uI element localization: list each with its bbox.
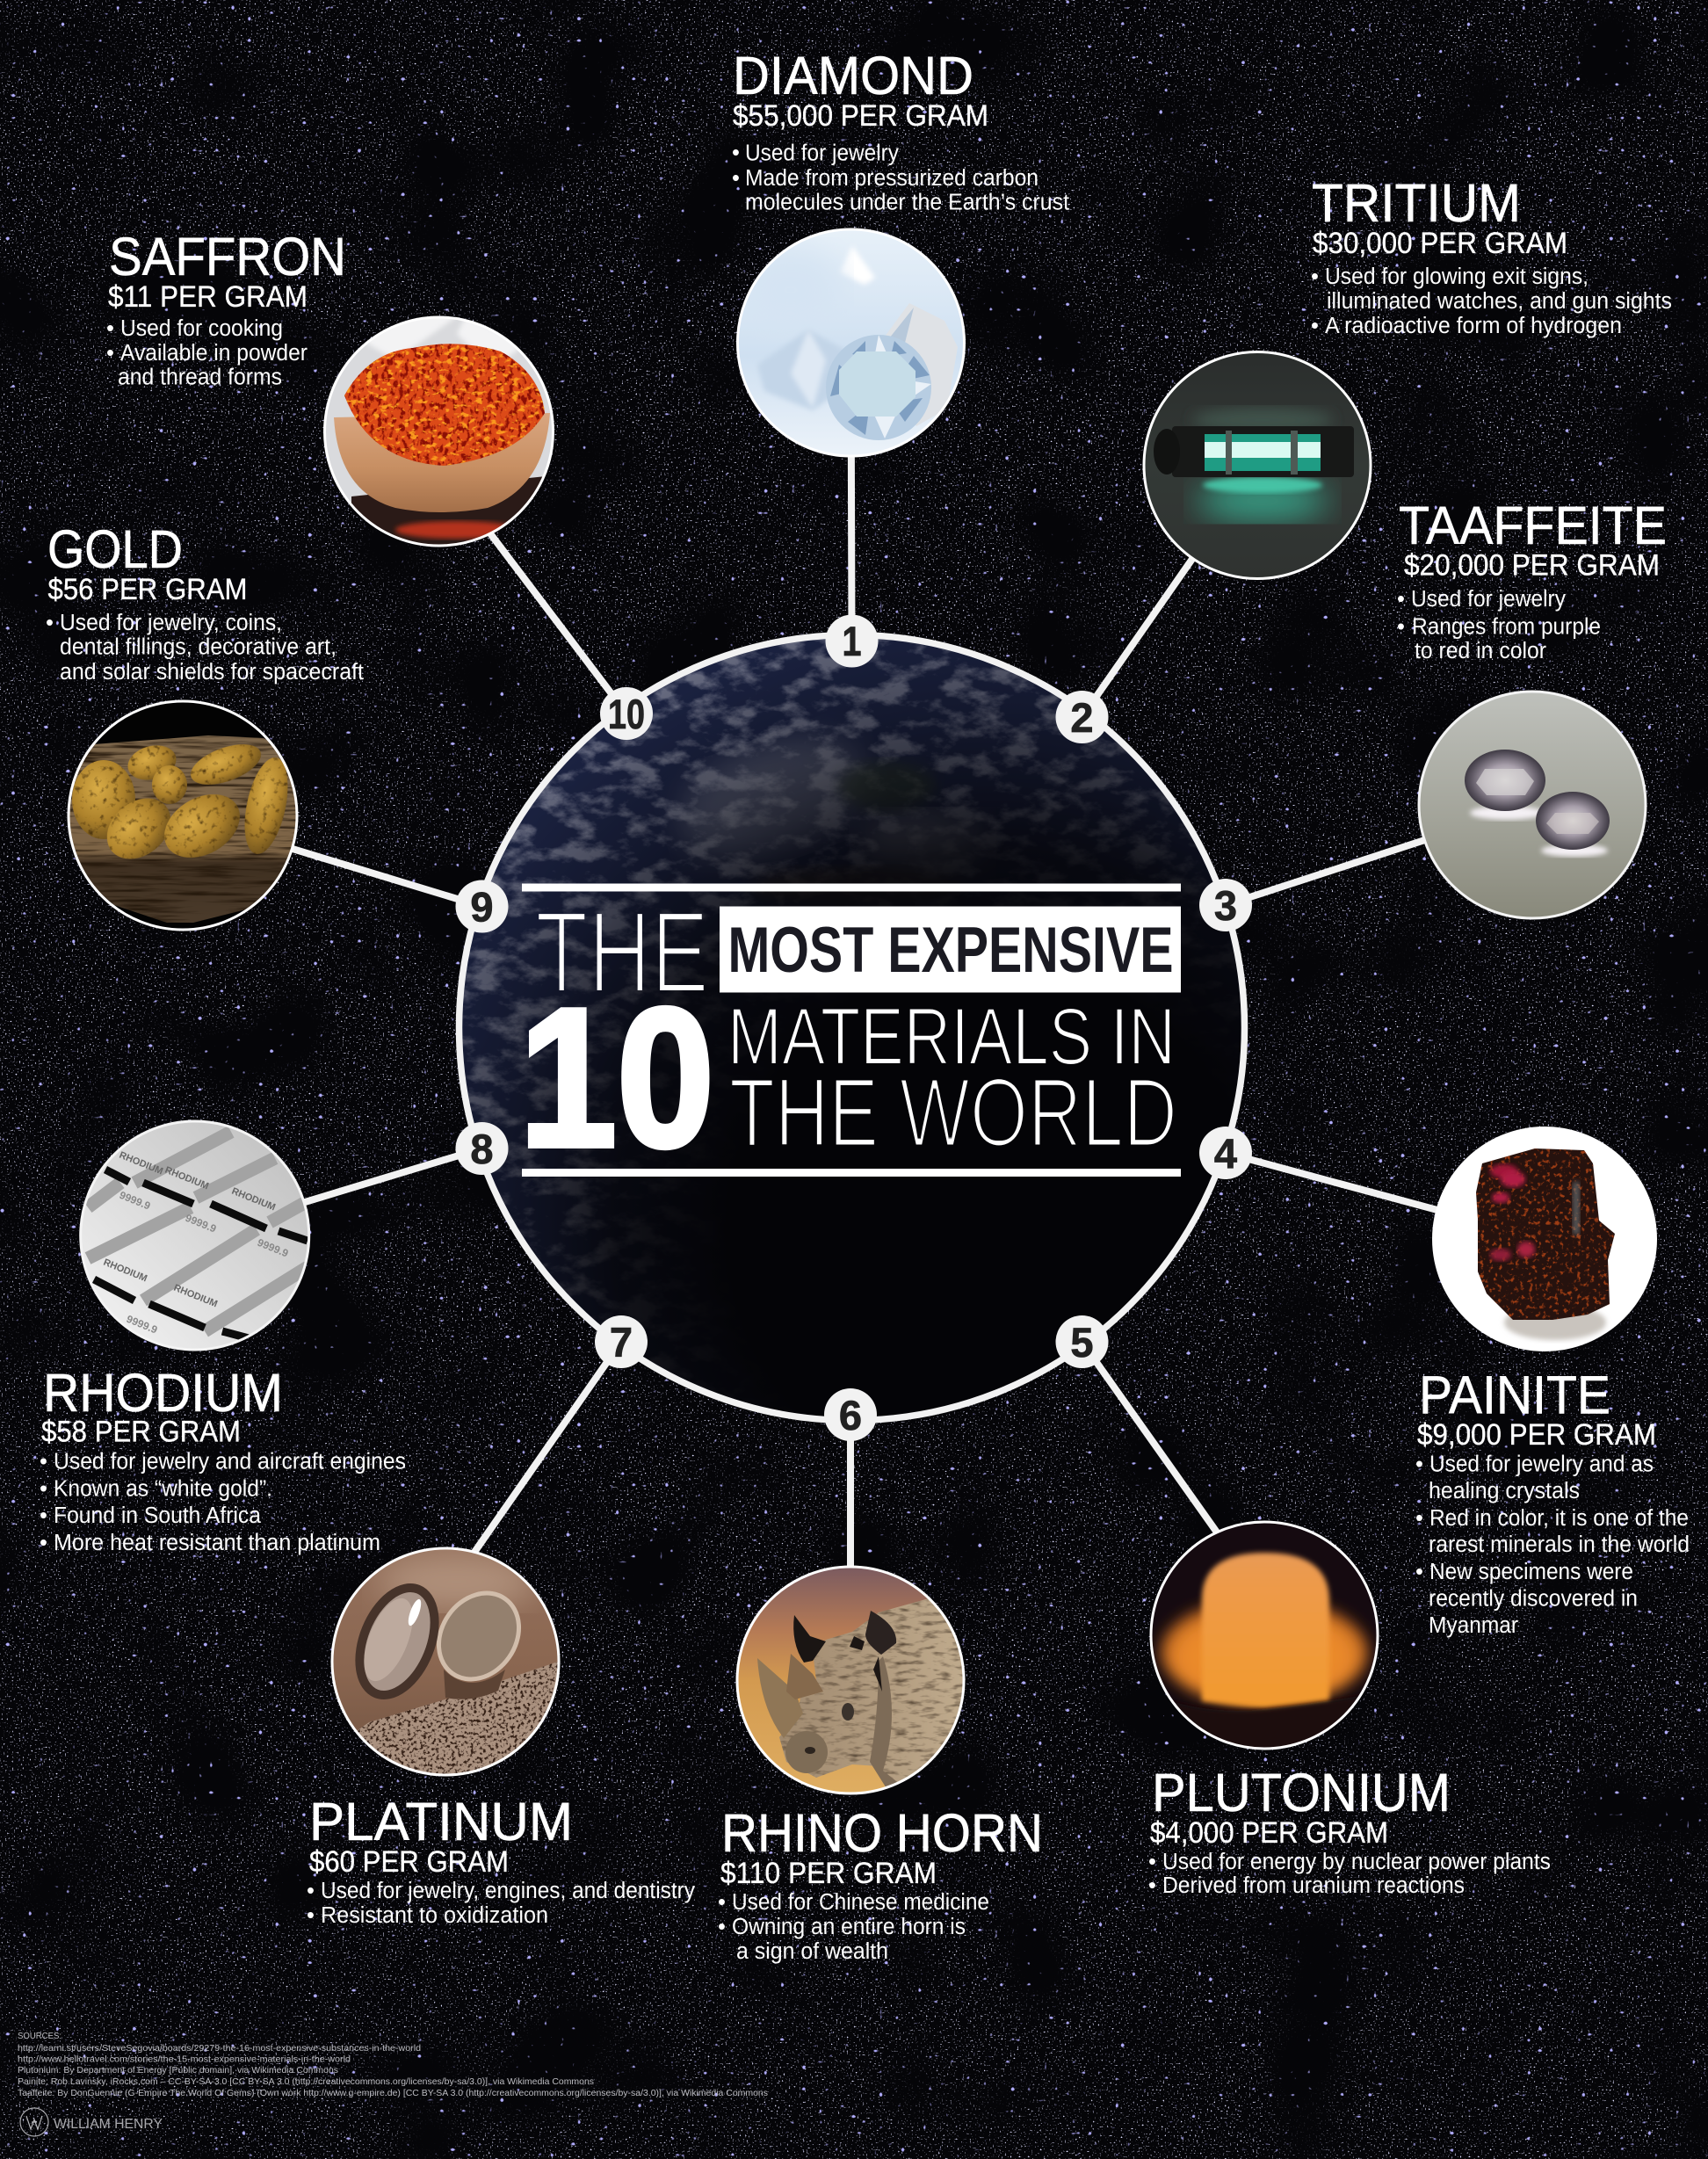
rhino horn text: RHINO HORN [721, 1803, 1043, 1863]
rhodium text: Found in South Africa [54, 1503, 262, 1528]
tritium text: • [1311, 264, 1319, 289]
photo: gold nuggets [53, 699, 299, 931]
taaffeite text: Ranges from purple [1412, 615, 1601, 640]
photo: taaffeite gems [1416, 690, 1648, 920]
gold text: Used for jewelry, coins, [60, 611, 282, 635]
saffron text: and thread forms [118, 366, 282, 390]
rhodium text: Known as “white gold”. [54, 1476, 272, 1501]
plutonium text: • [1148, 1850, 1156, 1874]
platinum text: $60 PER GRAM [309, 1845, 509, 1879]
photo: painite crystal [1432, 1127, 1657, 1351]
panel: painite [1415, 1127, 1690, 1638]
painite text [1415, 1366, 1690, 1638]
photo: rhodium bars: RHODIUM [230, 1186, 277, 1213]
photo: rhino [736, 1566, 966, 1796]
saffron text: $11 PER GRAM [108, 280, 308, 314]
platinum text: • [307, 1903, 315, 1928]
badge 4 [1199, 1127, 1252, 1179]
plutonium text: $4,000 PER GRAM [1150, 1816, 1388, 1850]
rhino horn text: a sign of wealth [736, 1939, 888, 1964]
diamond text: • [732, 141, 740, 165]
badge 10: 10 [608, 691, 645, 737]
saffron text: Available in powder [120, 341, 308, 366]
badge 5: 5 [1070, 1319, 1094, 1366]
painite text: healing crystals [1429, 1479, 1580, 1503]
connector lines [183, 343, 1545, 1680]
title block: THE [535, 888, 709, 1017]
painite text: • [1415, 1506, 1423, 1531]
tritium text: A radioactive form of hydrogen [1325, 314, 1622, 338]
panel: saffron [106, 227, 562, 549]
photo: plutonium pellet [1142, 1520, 1386, 1753]
sources: http://learni.st/users/SteveSegovia/boards/29279-the-16-most-expensive-substances-in-the-world [18, 2043, 421, 2054]
gold text: dental fillings, decorative art, [60, 634, 337, 659]
title block: THE WORLD [729, 1059, 1177, 1167]
tritium text [1311, 173, 1672, 338]
taaffeite text: TAAFFEITE [1399, 496, 1667, 555]
sources: Painite: Rob Lavinsky, iRocks.com – CC-BY-SA-3.0 [CC BY-SA 3.0 (http://creativecommons.org/licenses/by-sa/3.0)], via Wikimedia Commons [18, 2076, 594, 2087]
sources: Plutonium: By Department of Energy [Public domain], via Wikimedia Commons [18, 2065, 338, 2076]
panel: taaffeite [1397, 496, 1667, 920]
painite text: • [1415, 1452, 1423, 1476]
painite text: • [1415, 1560, 1423, 1584]
badge 4: 4 [1214, 1130, 1237, 1177]
tritium text: Used for glowing exit signs, [1325, 264, 1589, 289]
photo: tritium vial [1142, 350, 1372, 582]
badge 3 [1199, 879, 1252, 931]
painite text: Used for jewelry and as [1429, 1452, 1654, 1476]
saffron text: • [106, 341, 114, 366]
taaffeite text [1397, 496, 1667, 663]
rhodium text [40, 1363, 406, 1555]
badge 6: 6 [839, 1392, 862, 1438]
title block: 10 [519, 967, 714, 1188]
diamond text: DIAMOND [733, 46, 973, 105]
logo: william henry: WILLIAM HENRY [54, 2117, 163, 2132]
badge 3: 3 [1214, 882, 1237, 929]
tritium text: $30,000 PER GRAM [1313, 227, 1567, 260]
diamond text: Made from pressurized carbon [745, 166, 1039, 191]
logo: william henry [20, 2108, 163, 2136]
diamond text: • [732, 166, 740, 191]
plutonium text: Derived from uranium reactions [1162, 1873, 1465, 1898]
taaffeite text: $20,000 PER GRAM [1404, 548, 1660, 582]
saffron text: SAFFRON [109, 227, 346, 286]
badge 7 [595, 1315, 648, 1368]
diamond text [732, 46, 1069, 214]
photo: rhodium bars: RHODIUM [163, 1165, 210, 1192]
rhino horn text: Used for Chinese medicine [732, 1890, 989, 1915]
photo: diamonds [734, 227, 969, 462]
badge 8 [455, 1122, 508, 1175]
tritium text: illuminated watches, and gun sights [1327, 289, 1672, 314]
rhino horn text: • [718, 1915, 726, 1939]
panel: rhino horn [718, 1566, 1043, 1964]
photo: saffron bowl [323, 308, 562, 549]
taaffeite text: • [1397, 615, 1405, 640]
painite text: rarest minerals in the world [1429, 1532, 1690, 1557]
tritium text: TRITIUM [1312, 173, 1521, 233]
painite text: PAINITE [1419, 1366, 1610, 1425]
plutonium text: • [1148, 1873, 1156, 1898]
painite text: Myanmar [1429, 1613, 1518, 1638]
platinum text: Used for jewelry, engines, and dentistry [321, 1879, 695, 1903]
plutonium text: Used for energy by nuclear power plants [1162, 1850, 1551, 1874]
plutonium text [1148, 1763, 1551, 1898]
earth globe [452, 628, 1252, 1428]
badge 2 [1056, 691, 1109, 743]
gold text: GOLD [47, 519, 183, 579]
gold text: $56 PER GRAM [47, 573, 248, 606]
diamond text: $55,000 PER GRAM [733, 99, 988, 133]
photo: rhodium bars: RHODIUM [102, 1257, 148, 1284]
badge 9 [455, 880, 508, 933]
saffron text: • [106, 316, 114, 341]
painite text: $9,000 PER GRAM [1417, 1418, 1656, 1452]
outer ring [459, 634, 1244, 1420]
rhodium text: RHODIUM [43, 1363, 283, 1423]
sources: Taaffeite: By DonGuennie (G-Empire The World Of Gems) (Own work http://www.g-empire.de) [CC BY-SA 3.0 (http://creativecommons.org/licenses/by-sa/3.0)], via Wikimedia Commons [18, 2088, 768, 2098]
panel: gold [46, 519, 364, 931]
photo: rhodium bars: 9999.9 [184, 1212, 218, 1235]
badge 1 [826, 615, 879, 668]
tritium text: • [1311, 314, 1319, 338]
diamond text: Used for jewelry [745, 141, 899, 165]
photo: rhodium bars: 9999.9 [118, 1189, 152, 1213]
gold text [46, 519, 364, 685]
saffron text [106, 227, 346, 390]
rhodium text: • [40, 1476, 47, 1501]
painite text: New specimens were [1429, 1560, 1633, 1584]
photo: rhodium bars: 9999.9 [125, 1313, 159, 1337]
platinum text: • [307, 1879, 315, 1903]
taaffeite text: • [1397, 587, 1405, 612]
saffron text: Used for cooking [120, 316, 283, 341]
sources: http://www.hellotravel.com/stories/the-15-most-expensive-materials-in-the-world [18, 2054, 351, 2065]
platinum text [307, 1792, 695, 1928]
panel: diamond [732, 46, 1069, 462]
rhodium text: $58 PER GRAM [41, 1415, 241, 1448]
rhodium text: Used for jewelry and aircraft engines [54, 1450, 406, 1474]
rhino horn text: Owning an entire horn is [732, 1915, 966, 1939]
badge 1: 1 [842, 618, 861, 664]
rhino horn text [718, 1803, 1043, 1964]
photo: rhodium bars: 9999.9 [256, 1236, 290, 1260]
sources: SOURCES: [18, 2031, 62, 2041]
badge 9: 9 [470, 884, 494, 930]
photo: rhodium bars [79, 1120, 311, 1351]
title block [519, 884, 1181, 1188]
title block: MATERIALS IN [727, 992, 1176, 1082]
badge 2: 2 [1070, 694, 1094, 741]
gold text: • [46, 611, 54, 635]
diamond text: molecules under the Earth’s crust [745, 190, 1069, 214]
panel: platinum [307, 1547, 695, 1928]
painite text: Red in color, it is one of the [1429, 1506, 1689, 1531]
title block: MOST EXPENSIVE [727, 915, 1174, 986]
photo: rhodium bars: RHODIUM [172, 1283, 219, 1309]
painite text: recently discovered in [1429, 1587, 1638, 1612]
taaffeite text: Used for jewelry [1411, 587, 1566, 612]
platinum text: Resistant to oxidization [321, 1903, 548, 1928]
sources [18, 2031, 768, 2098]
photo: platinum rings [330, 1547, 561, 1777]
taaffeite text: to red in color [1415, 639, 1546, 663]
rhodium text: • [40, 1450, 47, 1474]
badge 7: 7 [610, 1319, 633, 1366]
panel: tritium [1142, 173, 1672, 582]
panel: rhodium [40, 1120, 406, 1555]
platinum text: PLATINUM [309, 1792, 573, 1851]
plutonium text: PLUTONIUM [1152, 1763, 1451, 1822]
badge 6 [824, 1388, 877, 1441]
rhino horn text: • [718, 1890, 726, 1915]
rhodium text: • [40, 1531, 47, 1555]
panel: plutonium [1142, 1520, 1551, 1898]
rhino horn text: $110 PER GRAM [720, 1857, 937, 1890]
badge 8: 8 [470, 1126, 494, 1172]
rhodium text: • [40, 1503, 47, 1528]
photo: rhodium bars: RHODIUM [118, 1150, 164, 1177]
gold text: and solar shields for spacecraft [60, 660, 364, 685]
badge 5 [1056, 1315, 1109, 1368]
rhodium text: More heat resistant than platinum [54, 1531, 380, 1555]
